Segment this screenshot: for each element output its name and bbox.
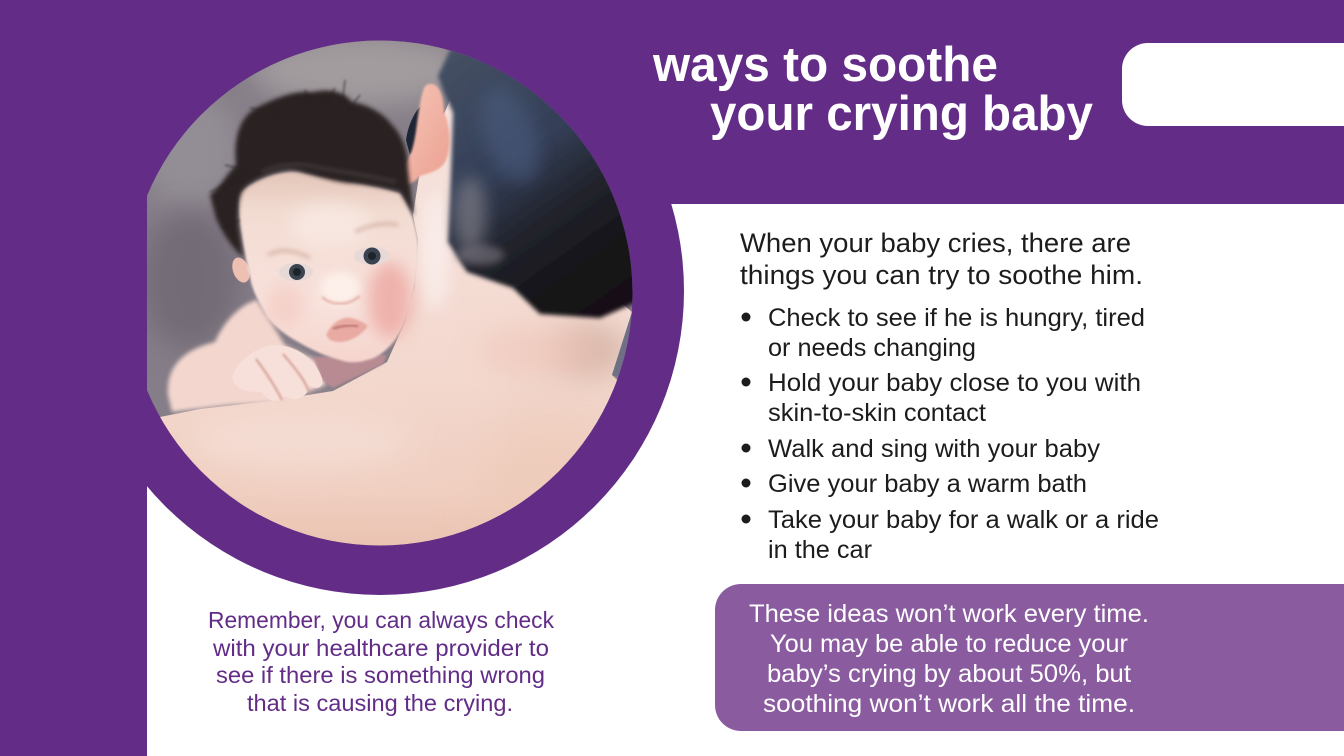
photo: father holding baby — [147, 40, 632, 546]
bullet: walk or ride — [742, 506, 1159, 564]
title: your crying baby — [710, 87, 1093, 141]
healthcare provider note: see if there is something wrong — [216, 662, 545, 688]
baby's nose — [320, 272, 360, 304]
bullet: hungry, tired, changing — [742, 304, 1145, 362]
strip of background right of neck — [612, 314, 632, 377]
bullet: walk and sing: Walk and sing with your baby — [768, 435, 1101, 463]
baby's hair — [210, 80, 414, 257]
callout text: You may be able to reduce your — [770, 630, 1128, 658]
white content panel — [147, 204, 1344, 756]
healthcare provider note: Remember, you can always check — [208, 607, 554, 633]
callout text: These ideas won’t work every time. — [749, 600, 1149, 628]
healthcare provider note: that is causing the crying. — [247, 690, 513, 716]
bullet: skin-to-skin — [742, 369, 1141, 427]
callout text — [749, 600, 1149, 718]
callout text: soothing won’t work all the time. — [763, 690, 1135, 718]
purple circle frame — [76, 0, 684, 595]
title — [652, 38, 1093, 141]
title: ways to soothe — [652, 38, 998, 92]
intro text: When your baby cries, there are — [740, 228, 1131, 258]
bullet: walk or ride: Take your baby for a walk or a ride — [768, 506, 1159, 534]
baby's ear — [232, 258, 250, 282]
man's shoulder and neck — [160, 100, 632, 546]
bullet: skin-to-skin: Hold your baby close to you with — [768, 369, 1141, 397]
bullet: skin-to-skin: skin-to-skin contact — [768, 399, 986, 427]
man's ear — [405, 82, 450, 184]
dark hair behind ear — [406, 106, 421, 155]
baby's face — [238, 172, 418, 362]
bullet list — [742, 304, 1159, 564]
man's hair — [438, 40, 645, 318]
callout text: baby’s crying by about 50%, but — [767, 660, 1131, 688]
bullet: warm bath: Give your baby a warm bath — [768, 470, 1087, 498]
healthcare provider note: with your healthcare provider to — [212, 635, 549, 661]
baby's eyes — [279, 247, 390, 281]
bullet: hungry, tired, changing: or needs changing — [768, 334, 976, 362]
intro text: things you can try to soothe him. — [740, 260, 1143, 290]
bullet: hungry, tired, changing: Check to see if he is hungry, tired — [768, 304, 1145, 332]
healthcare provider note — [208, 607, 554, 716]
photo background — [147, 40, 632, 546]
bullet: walk or ride: in the car — [768, 536, 872, 564]
intro text — [740, 228, 1143, 290]
callout panel — [715, 584, 1344, 731]
white header tab — [1122, 43, 1344, 126]
baby's mouth — [326, 318, 368, 342]
baby's arm and hand — [168, 300, 387, 412]
